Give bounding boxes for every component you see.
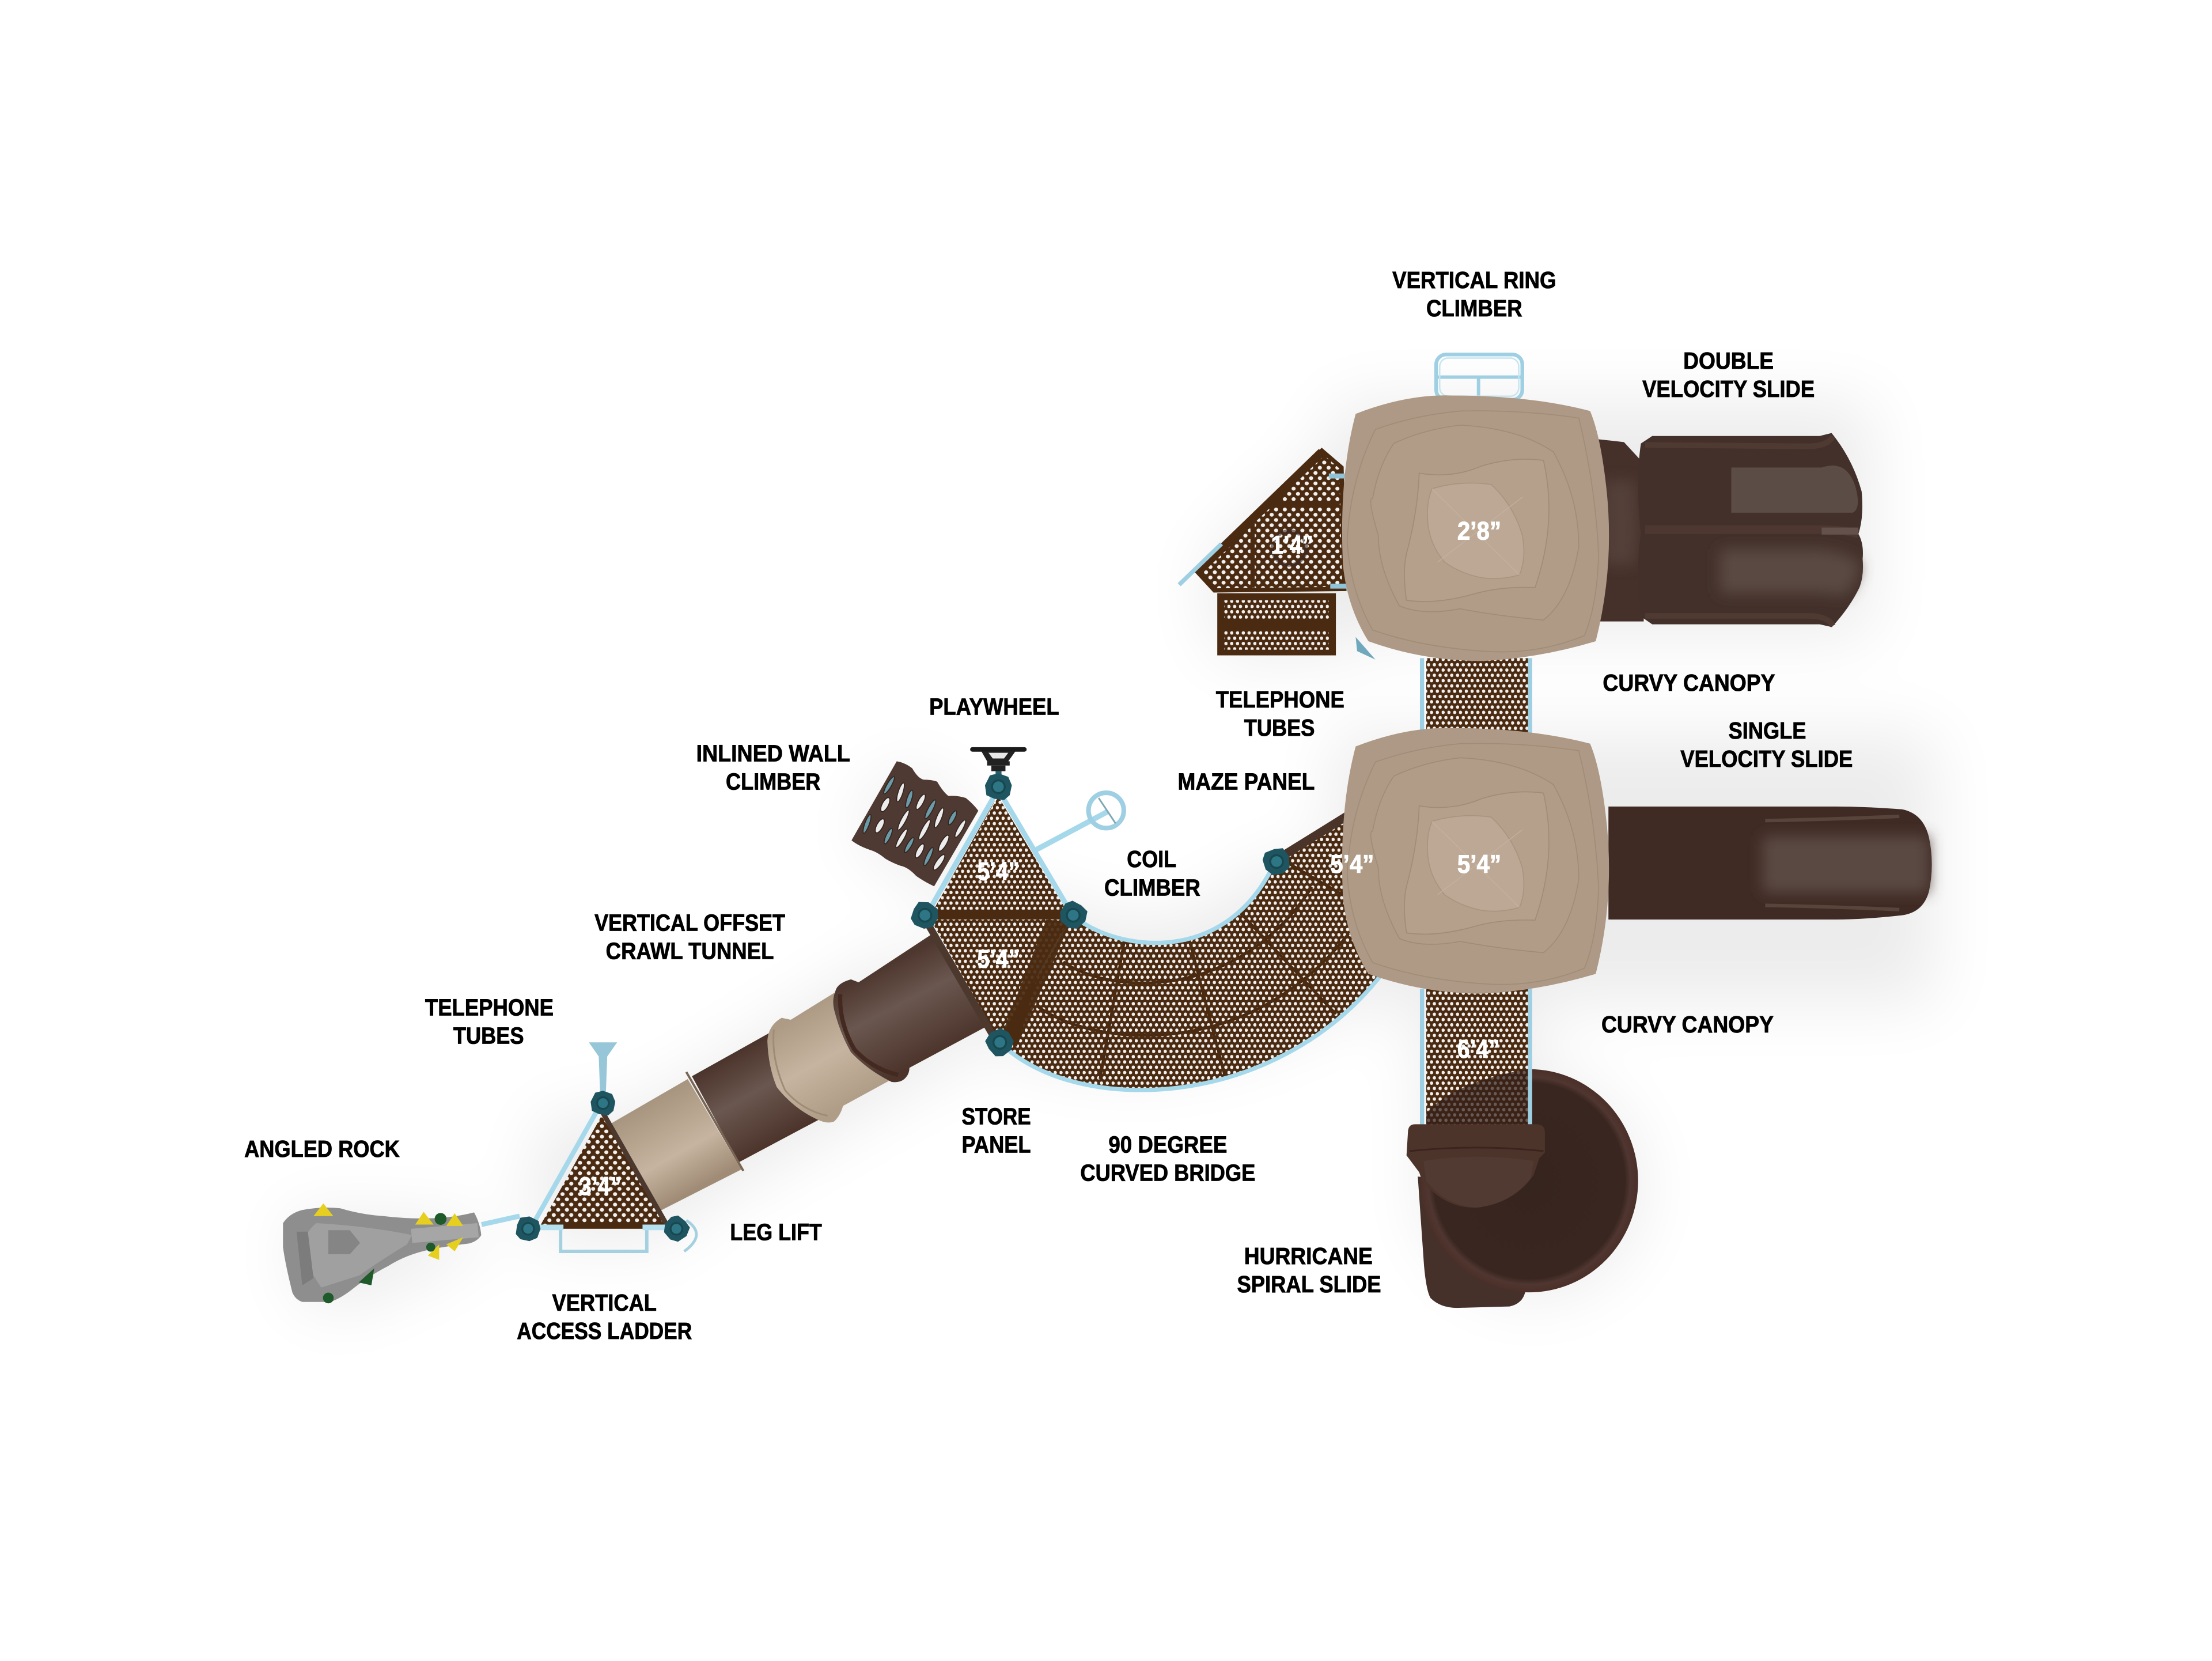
tunnel section: brown lower: [692, 1030, 826, 1163]
spiral slide bowl: [1421, 1069, 1638, 1292]
label: vertical ring climber: VERTICAL RING: [1392, 267, 1556, 293]
height labels: 2’8”: [1457, 517, 1501, 545]
icon: vertical ring climber: [1436, 354, 1522, 400]
label: single velocity slide: [1680, 717, 1853, 772]
label: vertical access ladder: VERTICAL: [552, 1289, 657, 1316]
label: double velocity slide: DOUBLE: [1683, 347, 1774, 374]
label: store panel: [961, 1103, 1031, 1157]
height labels: 5’4”: [977, 857, 1020, 886]
background shadows: [290, 403, 1935, 1307]
hurricane spiral slide hood: [1407, 1124, 1545, 1208]
label: vertical ring climber: CLIMBER: [1426, 295, 1522, 321]
label: vertical ring climber: [1392, 267, 1556, 321]
panel: lower bridge deck 6'4": [1422, 989, 1530, 1127]
panel: lower triangular deck 5'4": [928, 920, 1070, 1047]
label: inlined wall climber: INLINED WALL: [696, 740, 850, 766]
label: leg lift: LEG LIFT: [730, 1219, 822, 1245]
curvy canopy, upper: [1342, 395, 1609, 661]
label: vertical offset crawl tunnel: CRAWL TUNNEL: [606, 938, 774, 964]
icon: coil climber: [1036, 793, 1124, 850]
label: hurricane spiral slide: HURRICANE: [1244, 1243, 1373, 1269]
label: curvy canopy lower: CURVY CANOPY: [1601, 1011, 1774, 1038]
icon: angled rock: [283, 1204, 520, 1303]
icon: inclined wall climber: [851, 761, 978, 886]
label: 90 degree curved bridge: [1080, 1131, 1255, 1186]
label: telephone tubes lower: [425, 994, 554, 1049]
icon: connector nodes, small deck: [516, 1091, 694, 1246]
label: telephone tubes upper: TUBES: [1244, 714, 1315, 741]
label: double velocity slide: [1642, 347, 1815, 402]
single velocity slide: [1608, 807, 1932, 920]
label: coil climber: CLIMBER: [1104, 874, 1200, 901]
height labels: 5’4”: [1457, 850, 1501, 879]
label: coil climber: [1104, 846, 1200, 901]
panel: upper triangular deck 5'4": [931, 795, 1072, 920]
tunnel coupling ring: [686, 1072, 743, 1171]
label: 90 degree curved bridge: CURVED BRIDGE: [1080, 1159, 1255, 1186]
label: double velocity slide: VELOCITY SLIDE: [1642, 376, 1815, 402]
height labels: 1’4”: [1271, 531, 1313, 559]
label: vertical access ladder: ACCESS LADDER: [517, 1318, 692, 1344]
label: vertical access ladder: [517, 1289, 692, 1344]
tunnel section: tan lower: [607, 1079, 741, 1212]
hurricane spiral slide chute: [1418, 1176, 1525, 1308]
label: store panel: PANEL: [961, 1131, 1031, 1157]
label: inlined wall climber: CLIMBER: [726, 768, 820, 794]
label: inlined wall climber: [696, 740, 850, 794]
label: playwheel: PLAYWHEEL: [929, 693, 1059, 720]
tunnel section: brown upper with flare: [833, 932, 988, 1082]
vertical offset crawl tunnel: [607, 932, 988, 1212]
label: maze panel: MAZE PANEL: [1178, 768, 1315, 794]
panel: connecting bridge between canopies: [1422, 658, 1530, 737]
label: angled rock: ANGLED ROCK: [244, 1136, 400, 1162]
height labels: 5’4”: [977, 945, 1020, 973]
icon: leg lift: [684, 1220, 696, 1251]
label: vertical offset crawl tunnel: VERTICAL OFFSET: [594, 910, 785, 936]
label: hurricane spiral slide: SPIRAL SLIDE: [1237, 1271, 1381, 1297]
label: vertical offset crawl tunnel: [594, 910, 785, 964]
height labels: 3’4”: [579, 1172, 622, 1201]
panel: maze panel tower 1'4": [1179, 451, 1376, 660]
panel: curved bridge: [1000, 814, 1407, 1090]
label: hurricane spiral slide: [1237, 1243, 1381, 1297]
icon: connector nodes, main decks: [910, 773, 1295, 1061]
height labels: 5’4”: [1330, 850, 1374, 879]
height labels: 6’4”: [1457, 1035, 1499, 1064]
label: curvy canopy upper: CURVY CANOPY: [1603, 669, 1775, 696]
icon: vertical access ladder: [537, 1227, 669, 1251]
label: single velocity slide: SINGLE: [1729, 717, 1806, 744]
label: telephone tubes upper: TELEPHONE: [1216, 686, 1344, 713]
height labels: [579, 517, 1501, 1201]
icon: telephone tube: [589, 1042, 617, 1095]
label: coil climber: COIL: [1127, 846, 1176, 872]
panel: small triangular deck 3'4": [535, 1110, 666, 1229]
tunnel section: tan upper with flare: [767, 993, 889, 1122]
label: store panel: STORE: [961, 1103, 1031, 1129]
icon: playwheel: [970, 747, 1027, 785]
curvy canopy, lower: [1342, 728, 1609, 994]
double velocity slide: [1599, 433, 1863, 627]
label: telephone tubes upper: [1216, 686, 1344, 741]
label: single velocity slide: VELOCITY SLIDE: [1680, 746, 1853, 772]
label: 90 degree curved bridge: 90 DEGREE: [1108, 1131, 1227, 1157]
label: telephone tubes lower: TUBES: [453, 1023, 524, 1049]
label: telephone tubes lower: TELEPHONE: [425, 994, 554, 1021]
